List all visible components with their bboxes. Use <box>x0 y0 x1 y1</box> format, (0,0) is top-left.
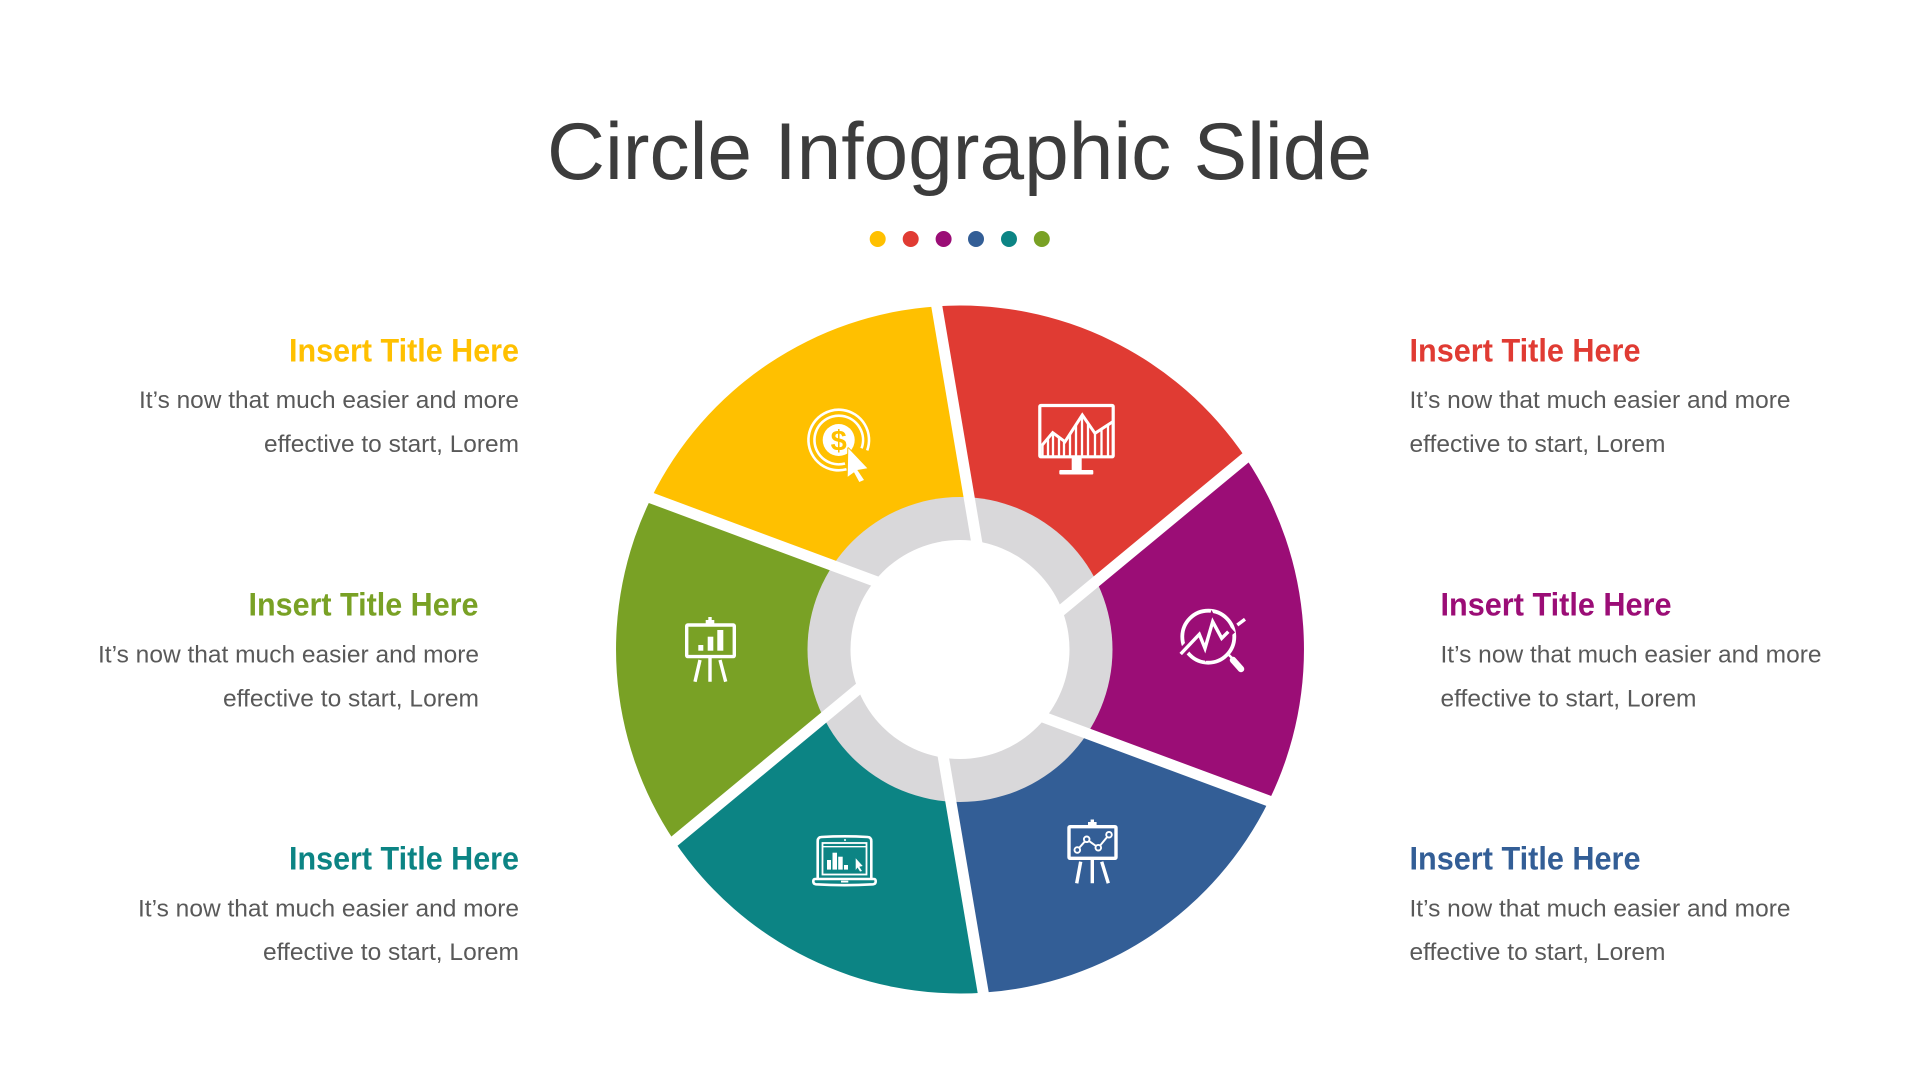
text block: green: Insert Title Here <box>248 586 478 622</box>
text block: yellow: effective to start, Lorem <box>264 431 519 458</box>
text block: teal: Insert Title Here <box>289 840 519 876</box>
text block: red: It’s now that much easier and more <box>1410 387 1790 414</box>
icon: dollar target with cursor: $ <box>831 426 847 458</box>
segment: purple <box>925 457 1401 910</box>
icon: laptop with bar chart <box>813 836 876 885</box>
icon: magnifier over line chart <box>1178 611 1245 669</box>
text block: purple: It’s now that much easier and more <box>1440 642 1822 668</box>
icon: dollar target with cursor <box>808 410 869 482</box>
segment: red <box>937 306 1246 676</box>
text block: green <box>98 586 479 712</box>
circular pinwheel diagram <box>519 230 1401 1069</box>
text block: red: Insert Title Here <box>1410 332 1640 368</box>
text block: green: It’s now that much easier and more <box>98 642 479 668</box>
text block: purple: Insert Title Here <box>1440 586 1672 622</box>
text block: purple: effective to start, Lorem <box>1440 686 1696 712</box>
text block: teal <box>138 840 519 966</box>
text block: teal: It’s now that much easier and more <box>138 896 519 922</box>
segment: green <box>519 389 995 842</box>
icon: monitor with area chart <box>1040 406 1113 474</box>
title colour dots <box>870 231 1050 247</box>
text block: red <box>1410 332 1790 458</box>
icon: easel with bar chart <box>687 617 734 682</box>
text block: yellow: Insert Title Here <box>289 332 519 368</box>
segment: teal <box>674 623 983 993</box>
text block: blue <box>1410 840 1790 966</box>
text block: green: effective to start, Lorem <box>223 686 479 712</box>
text block: yellow: It’s now that much easier and more <box>139 387 519 414</box>
grey inner ring <box>808 497 1112 802</box>
text block: blue: Insert Title Here <box>1410 840 1640 876</box>
text block: purple <box>1440 586 1822 712</box>
text block: red: effective to start, Lorem <box>1410 431 1666 458</box>
text block: teal: effective to start, Lorem <box>263 939 519 966</box>
text block: blue: It’s now that much easier and more <box>1410 896 1790 922</box>
text block: yellow <box>139 332 519 458</box>
title: Circle Infographic Slide <box>547 107 1372 197</box>
white centre circle <box>850 540 1070 759</box>
icon: easel with line chart <box>1069 820 1116 883</box>
segment: yellow <box>651 230 1126 683</box>
segment: blue <box>794 616 1269 1069</box>
text block: blue: effective to start, Lorem <box>1410 939 1666 966</box>
